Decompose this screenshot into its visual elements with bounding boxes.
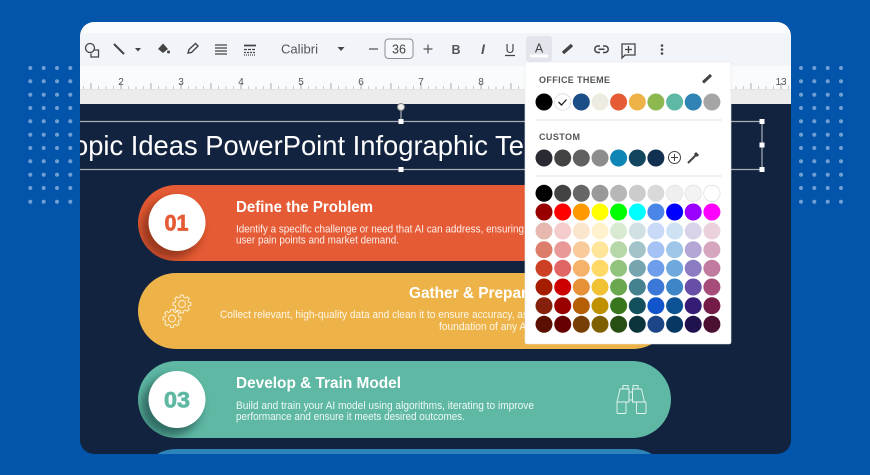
title selection box <box>80 104 764 172</box>
icon: link <box>595 46 608 52</box>
toolbar <box>86 36 663 62</box>
icon: text color active <box>526 36 552 62</box>
editor window <box>73 22 791 454</box>
font size box <box>385 39 413 58</box>
icon: binoculars <box>617 386 646 414</box>
icon: comment <box>622 44 635 58</box>
ruler: 3 <box>178 77 184 88</box>
font name: Calibri <box>281 42 318 56</box>
ruler: 13 <box>775 77 787 88</box>
icon: text color active: A <box>535 42 544 56</box>
ruler: 2 <box>118 77 124 88</box>
number badge 01: 01 <box>164 210 188 236</box>
ruler: 5 <box>298 77 304 88</box>
slide title: opic Ideas PowerPoint Infographic Ter <box>73 130 533 161</box>
panel: step 2 gather and prepare <box>138 273 671 349</box>
icon: shapes <box>86 44 98 57</box>
icon: highlight pen <box>563 45 572 53</box>
description <box>220 309 529 333</box>
number badge 01 <box>141 194 206 259</box>
custom swatches <box>536 150 664 166</box>
icon: add custom color <box>668 152 680 164</box>
panel: step 1 define the problem <box>138 185 525 261</box>
ruler: 8 <box>478 77 484 88</box>
description: Identify a specific challenge or need that AI can address, ensuring <box>236 224 524 236</box>
icon: line tool <box>114 44 124 54</box>
ruler: 6 <box>358 77 364 88</box>
description <box>236 224 524 246</box>
heading: custom: CUSTOM <box>539 132 580 142</box>
icon: line dropdown arrow <box>135 48 141 52</box>
icon: plus <box>424 44 432 54</box>
office theme swatches <box>536 94 720 110</box>
panel: step 3 develop and train model <box>138 361 671 438</box>
background dot grid: right <box>799 66 843 204</box>
icon: more menu <box>661 44 663 55</box>
heading: Gather & Prepar <box>409 285 527 302</box>
panel: step 4 partly visible <box>157 449 652 454</box>
number badge 03 <box>141 371 206 436</box>
heading: Define the Problem <box>236 199 373 216</box>
standard color grid <box>536 185 720 333</box>
icon: border dash <box>244 46 256 55</box>
number badge 03: 03 <box>164 388 190 412</box>
icon: bold: B <box>451 43 461 57</box>
icon: font dropdown arrow <box>338 47 344 51</box>
ruler: 4 <box>238 77 244 88</box>
ruler: 7 <box>418 77 424 88</box>
icon: underline: U <box>505 42 515 56</box>
icon: minus <box>369 48 378 50</box>
icon: border pen <box>188 44 198 53</box>
icon: fill color <box>158 44 170 54</box>
description: Build and train your AI model using algorithms, iterating to improve <box>236 400 534 412</box>
icon: italic: I <box>481 41 486 57</box>
icon: border weight <box>215 45 227 54</box>
ruler <box>80 77 791 90</box>
description: foundation of any AI <box>439 321 529 333</box>
heading: office theme: OFFICE THEME <box>539 75 610 85</box>
font size box: 36 <box>392 42 406 56</box>
icon: gears <box>163 295 191 327</box>
description: user pain points and market demand. <box>236 234 399 246</box>
icon: edit pencil <box>703 75 711 82</box>
icon: eyedropper <box>688 153 698 163</box>
heading: Develop & Train Model <box>236 375 401 392</box>
background dot grid: left <box>28 66 72 204</box>
description: Collect relevant, high-quality data and clean it to ensure accuracy, as <box>220 309 528 321</box>
description <box>236 400 534 423</box>
color picker popup <box>525 62 731 344</box>
description: performance and ensure it meets desired outcomes. <box>236 411 465 423</box>
